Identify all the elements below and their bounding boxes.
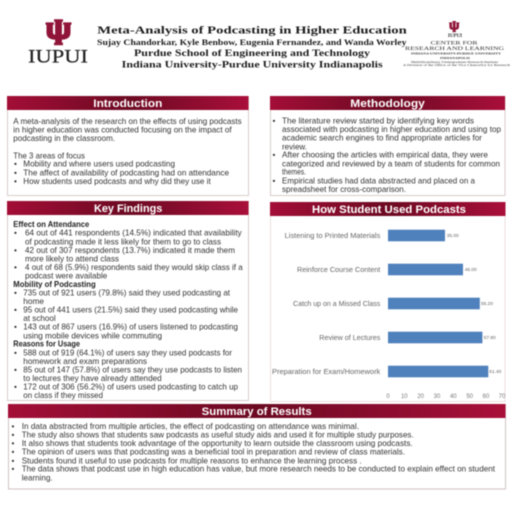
methodology text: academic search engines to find appropriate articles for: [282, 133, 482, 143]
methodology text: spreadsheet for cross-comparison.: [282, 184, 406, 194]
panel: introduction: [7, 96, 248, 196]
methodology text: After choosing the articles with empirical data, they were: [282, 150, 488, 160]
x axis: 40: [450, 394, 457, 400]
icon: small trident: [449, 21, 459, 32]
summary text: The study also shows that students saw podcasts as useful study aids and used it for multiple study purposes.: [22, 430, 414, 440]
summary text: •: [12, 430, 14, 440]
findings: effect on attendance: •: [14, 245, 17, 255]
bar: Review of Lectures: 57.80: [484, 335, 496, 341]
heading: Introduction: [7, 96, 248, 110]
heading: Key Findings: [7, 201, 248, 215]
findings: effect on attendance: [13, 219, 243, 280]
methodology text: [272, 115, 501, 194]
intro text: •: [14, 159, 17, 169]
school: Purdue School of Engineering and Technology: [134, 49, 370, 59]
findings: reasons for usage: on class if they missed: [23, 390, 103, 400]
methodology text: •: [272, 115, 276, 125]
panel: summary of results: [8, 404, 506, 489]
intro text: A meta-analysis of the research on the effects of using podcasts: [13, 116, 242, 126]
heading: Key Findings: Key Findings: [94, 203, 162, 215]
summary text: •: [12, 438, 14, 448]
bar: Reinforce Course Content: 46.00: [465, 267, 477, 273]
findings: reasons for usage: 85 out of 147 (57.8%) of users say they use podcasts to listen: [23, 364, 242, 374]
findings: mobility of podcasting: •: [14, 288, 17, 298]
bar: Review of Lectures: [319, 332, 496, 343]
x axis: 70: [499, 394, 506, 400]
methodology text: Empirical studies had data abstracted and placed on a: [282, 175, 475, 185]
summary text: In data abstracted from multiple articles, the effect of podcasting on attendance was minimal.: [22, 421, 359, 431]
logo text: IUPUI: [448, 34, 462, 39]
heading: Methodology: [270, 96, 505, 110]
x axis: 30: [434, 394, 441, 400]
findings: mobility of podcasting: 95 out of 441 users (21.5%) said they used podcasting while: [23, 305, 238, 315]
findings: effect on attendance: •: [14, 262, 17, 272]
x axis: 0: [386, 394, 390, 400]
methodology text: themes.: [282, 167, 306, 177]
findings: mobility of podcasting: Mobility of Podcasting: [13, 279, 96, 289]
logo text: INDIANA UNIVERSITY-PURDUE UNIVERSITY: [411, 52, 502, 56]
findings: reasons for usage: •: [14, 364, 17, 374]
icon: IU trident: [46, 19, 72, 45]
bar: Listening to Printed Materials: 35.00: [447, 233, 459, 239]
x axis: 60: [483, 394, 490, 400]
heading: How Student Used Podcasts: [270, 202, 506, 216]
logo text: [403, 34, 511, 67]
summary text: The opinion of users was that podcasting was a beneficial tool in preparation and review of class materials.: [22, 447, 405, 457]
x axis: 20: [417, 394, 425, 400]
methodology text: The literature review started by identifying key words: [282, 115, 474, 125]
summary text: •: [12, 447, 14, 457]
IUPUI wordmark: IUPUI: [28, 48, 88, 68]
summary text: •: [12, 455, 14, 465]
methodology text: •: [272, 175, 276, 185]
findings: reasons for usage: homework and exam preparations: [23, 356, 147, 366]
findings: mobility of podcasting: [13, 279, 238, 340]
summary text: The data shows that podcast use in high education has value, but more research needs to be conducted to explain effect on student: [22, 464, 496, 474]
intro text: in higher education was conducted focusing on the impact of: [13, 124, 232, 134]
findings: mobility of podcasting: home: [23, 296, 44, 306]
methodology text: review.: [282, 141, 307, 151]
bar chart: [272, 230, 506, 400]
title block: [97, 25, 407, 70]
bar: Review of Lectures: Review of Lectures: [319, 333, 381, 342]
x axis: 50: [466, 394, 474, 400]
intro text: •: [14, 167, 17, 177]
findings: mobility of podcasting: •: [14, 322, 17, 332]
summary text: •: [12, 421, 14, 431]
logo text: CENTER FOR: [430, 40, 478, 46]
findings: reasons for usage: to lectures they have already attended: [23, 373, 162, 383]
authors: Sujay Chandorkar, Kyle Benbow, Eugenia Fernandez, and Wanda Worley: [97, 38, 406, 47]
findings: reasons for usage: •: [14, 347, 17, 357]
heading: Summary of Results: Summary of Results: [202, 406, 312, 418]
intro text: The 3 areas of focus: [13, 150, 85, 160]
panel: how student used podcasts: [270, 202, 506, 402]
logo text: RESEARCH AND LEARNING: [405, 46, 504, 52]
findings: effect on attendance: Effect on Attendance: [13, 219, 90, 229]
findings: mobility of podcasting: at school: [23, 313, 56, 323]
bar: Listening to Printed Materials: [285, 230, 459, 241]
findings: effect on attendance: 64 out of 441 respondents (14.5%) indicated that availability: [25, 228, 243, 238]
findings: effect on attendance: podcast were available: [25, 270, 108, 280]
intro text: [13, 116, 242, 186]
x axis: 10: [401, 394, 408, 400]
logo: IUPUI: [28, 19, 88, 68]
heading: Summary of Results: [8, 404, 506, 418]
summary text: Students found it useful to use podcasts for multiple reasons to enhance the learning process .: [22, 455, 362, 465]
findings: mobility of podcasting: 735 out of 921 users (79.8%) said they used podcasting at: [23, 288, 231, 298]
bar: Catch up on a Missed Class: 56.20: [481, 301, 493, 307]
bar: Reinforce Course Content: Reinforce Course Content: [297, 265, 380, 274]
summary text: [12, 421, 496, 482]
intro text: How students used podcasts and why did they use it: [23, 176, 211, 186]
bar: Preparation for Exam/Homework: 61.40: [489, 369, 502, 375]
intro text: The affect of availability of podcasting had on attendance: [23, 167, 229, 177]
summary text: •: [12, 464, 14, 474]
findings: reasons for usage: [13, 339, 242, 400]
heading: How Student Used Podcasts: How Student Used Podcasts: [312, 204, 466, 216]
bar: Catch up on a Missed Class: Catch up on a Missed Class: [293, 299, 381, 308]
findings: reasons for usage: Reasons for Usage: [13, 339, 80, 349]
methodology text: •: [272, 150, 276, 160]
findings: effect on attendance: 42 out of 307 respondents (13.7%) indicated it made them: [25, 245, 235, 255]
summary text: It also shows that students took advantage of the opportunity to learn outside the classroom using podcasts.: [22, 438, 413, 448]
findings: effect on attendance: •: [14, 228, 17, 238]
summary text: learning.: [22, 472, 53, 482]
methodology text: associated with podcasting in higher education and using top: [282, 124, 501, 134]
intro text: podcasting in the classroom.: [13, 133, 115, 143]
findings: effect on attendance: 4 out of 68 (5.9%) respondents said they would skip class if a: [25, 262, 243, 272]
findings: mobility of podcasting: •: [14, 305, 17, 315]
panel: key findings: [7, 201, 248, 400]
panel: methodology: [270, 96, 505, 196]
findings: reasons for usage: 172 out of 306 (56.2%) of users used podcasting to catch up: [23, 382, 238, 392]
bar: Reinforce Course Content: [297, 264, 477, 275]
bar: Preparation for Exam/Homework: Preparation for Exam/Homework: [272, 367, 381, 376]
logo text: INDIANAPOLIS: [440, 56, 470, 60]
findings: mobility of podcasting: 143 out of 867 users (16.9%) of users listened to podcasting: [23, 322, 238, 332]
findings: effect on attendance: more likely to attend class: [25, 253, 119, 263]
logo text: A Division of the Office of the Vice Chancellor for Research: [403, 64, 511, 67]
bar: Preparation for Exam/Homework: [272, 366, 502, 377]
bar: Listening to Printed Materials: Listening to Printed Materials: [285, 231, 381, 240]
methodology text: categorized and reviewed by a team of students for common: [282, 158, 500, 168]
x axis: [386, 394, 506, 400]
findings: reasons for usage: 588 out of 919 (64.1%) of users say they used podcasts for: [23, 347, 232, 357]
heading: Methodology: Methodology: [350, 98, 426, 110]
poster title: Meta-Analysis of Podcasting in Higher Education: [97, 25, 407, 37]
intro text: Mobility and where users used podcasting: [23, 159, 175, 169]
logo: Center for Research and Learning: [403, 21, 511, 67]
university: Indiana University-Purdue University Indianapolis: [122, 60, 383, 70]
findings: reasons for usage: •: [14, 382, 17, 392]
logo text: Multidisciplinary Undergraduate Research Institute: [411, 61, 499, 64]
findings: mobility of podcasting: using mobile devices while commuting: [23, 330, 162, 340]
heading: Introduction: Introduction: [93, 98, 163, 110]
bar: Catch up on a Missed Class: [293, 298, 493, 309]
findings: effect on attendance: of podcasting made it less likely for them to go to class: [25, 236, 221, 246]
intro text: •: [14, 176, 17, 186]
